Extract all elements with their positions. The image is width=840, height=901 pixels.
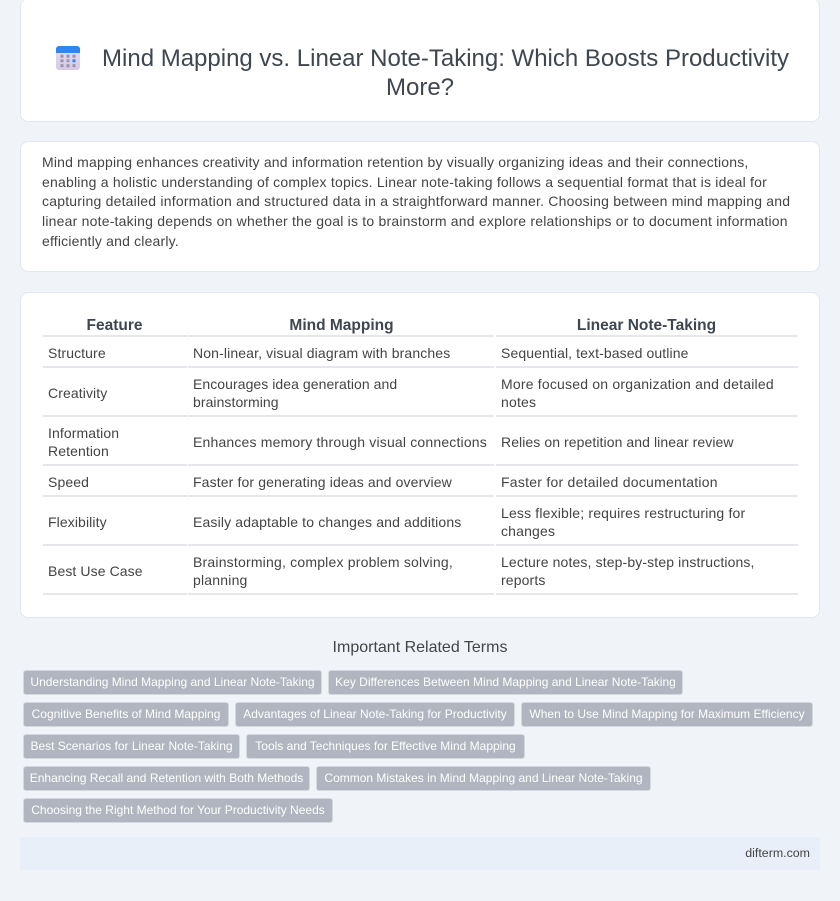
row: Information Retention: Information — [48, 425, 119, 441]
row: Best Use Case: reports — [501, 572, 545, 588]
intro text: capturing detailed information and structured data in a straightforward manner. Choosing between mind mapping and — [42, 193, 790, 209]
related terms heading: Important Related Terms — [333, 639, 507, 656]
heading: More? — [386, 74, 454, 101]
row: Speed: Faster for generating ideas and overview — [193, 474, 452, 490]
tag — [23, 702, 229, 727]
related terms tags — [23, 670, 813, 823]
row: Best Use Case: Best Use Case — [48, 563, 143, 579]
tag: Understanding Mind Mapping and Linear Note-Taking — [30, 675, 315, 689]
intro text: Mind mapping enhances creativity and information retention by visually organizing ideas and their connections, — [42, 154, 749, 170]
footer bar — [20, 837, 820, 870]
tag — [328, 670, 683, 695]
row: Information Retention: Retention — [48, 443, 109, 459]
table header: Feature: Feature — [86, 317, 142, 334]
tag: Choosing the Right Method for Your Productivity Needs — [31, 803, 325, 817]
row: Creativity: notes — [501, 394, 536, 410]
row: Creativity: More focused on organization and detailed — [501, 376, 774, 392]
row: Flexibility: changes — [501, 523, 555, 539]
row: Structure: Structure — [48, 345, 106, 361]
intro panel — [20, 141, 820, 272]
row: Structure — [48, 345, 688, 361]
row: Creativity: brainstorming — [193, 394, 279, 410]
table header: Mind Mapping: Mind Mapping — [289, 317, 394, 334]
tag — [235, 702, 515, 727]
row: Creativity: Encourages idea generation and — [193, 376, 397, 392]
title card — [20, 0, 820, 122]
row: Flexibility — [48, 505, 745, 539]
tag: Best Scenarios for Linear Note-Taking — [30, 739, 233, 753]
intro text: linear note-taking depends on whether the goal is to brainstorm and explore relationships or to document information — [42, 213, 788, 229]
intro text: enabling a holistic understanding of complex topics. Linear note-taking follows a sequential format that is ideal for — [42, 174, 767, 190]
row: Best Use Case — [48, 554, 755, 588]
table header: Linear Note-Taking: Linear Note-Taking — [577, 317, 716, 334]
row: Flexibility: Flexibility — [48, 514, 107, 530]
row: Best Use Case: Brainstorming, complex problem solving, — [193, 554, 453, 570]
tag — [316, 766, 651, 791]
row: Speed: Faster for detailed documentation — [501, 474, 718, 490]
row: Speed: Speed — [48, 474, 89, 490]
tag — [246, 734, 525, 759]
tag — [23, 798, 333, 823]
row: Structure: Sequential, text-based outline — [501, 345, 688, 361]
tag — [23, 734, 240, 759]
footer credit: difterm.com — [745, 846, 810, 860]
tag: Cognitive Benefits of Mind Mapping — [32, 707, 220, 721]
tag: Common Mistakes in Mind Mapping and Linear Note-Taking — [324, 771, 643, 785]
row: Information Retention: Relies on repetition and linear review — [501, 434, 734, 450]
row: Flexibility: Easily adaptable to changes and additions — [193, 514, 461, 530]
tag: Enhancing Recall and Retention with Both Methods — [30, 771, 303, 785]
intro text — [42, 154, 790, 249]
row: Best Use Case: Lecture notes, step-by-step instructions, — [501, 554, 755, 570]
tag: Advantages of Linear Note-Taking for Productivity — [243, 707, 507, 721]
icon: calendar — [56, 46, 80, 70]
comparison table panel — [20, 292, 820, 618]
row: Creativity — [48, 376, 774, 410]
row: Information Retention: Enhances memory through visual connections — [193, 434, 487, 450]
row: Structure: Non-linear, visual diagram with branches — [193, 345, 450, 361]
tag — [521, 702, 813, 727]
row: Best Use Case: planning — [193, 572, 248, 588]
tag: Tools and Techniques for Effective Mind Mapping — [255, 739, 516, 753]
intro text: efficiently and clearly. — [42, 233, 179, 249]
row: Creativity: Creativity — [48, 385, 107, 401]
heading — [102, 45, 789, 101]
row: Flexibility: Less flexible; requires restructuring for — [501, 505, 745, 521]
heading: Mind Mapping vs. Linear Note-Taking: Which Boosts Productivity — [102, 45, 789, 72]
row: Speed — [48, 474, 718, 490]
row: Information Retention — [48, 425, 734, 459]
tag: Key Differences Between Mind Mapping and Linear Note-Taking — [335, 675, 676, 689]
tag — [23, 766, 310, 791]
tag — [23, 670, 322, 695]
tag: When to Use Mind Mapping for Maximum Efficiency — [529, 707, 805, 721]
